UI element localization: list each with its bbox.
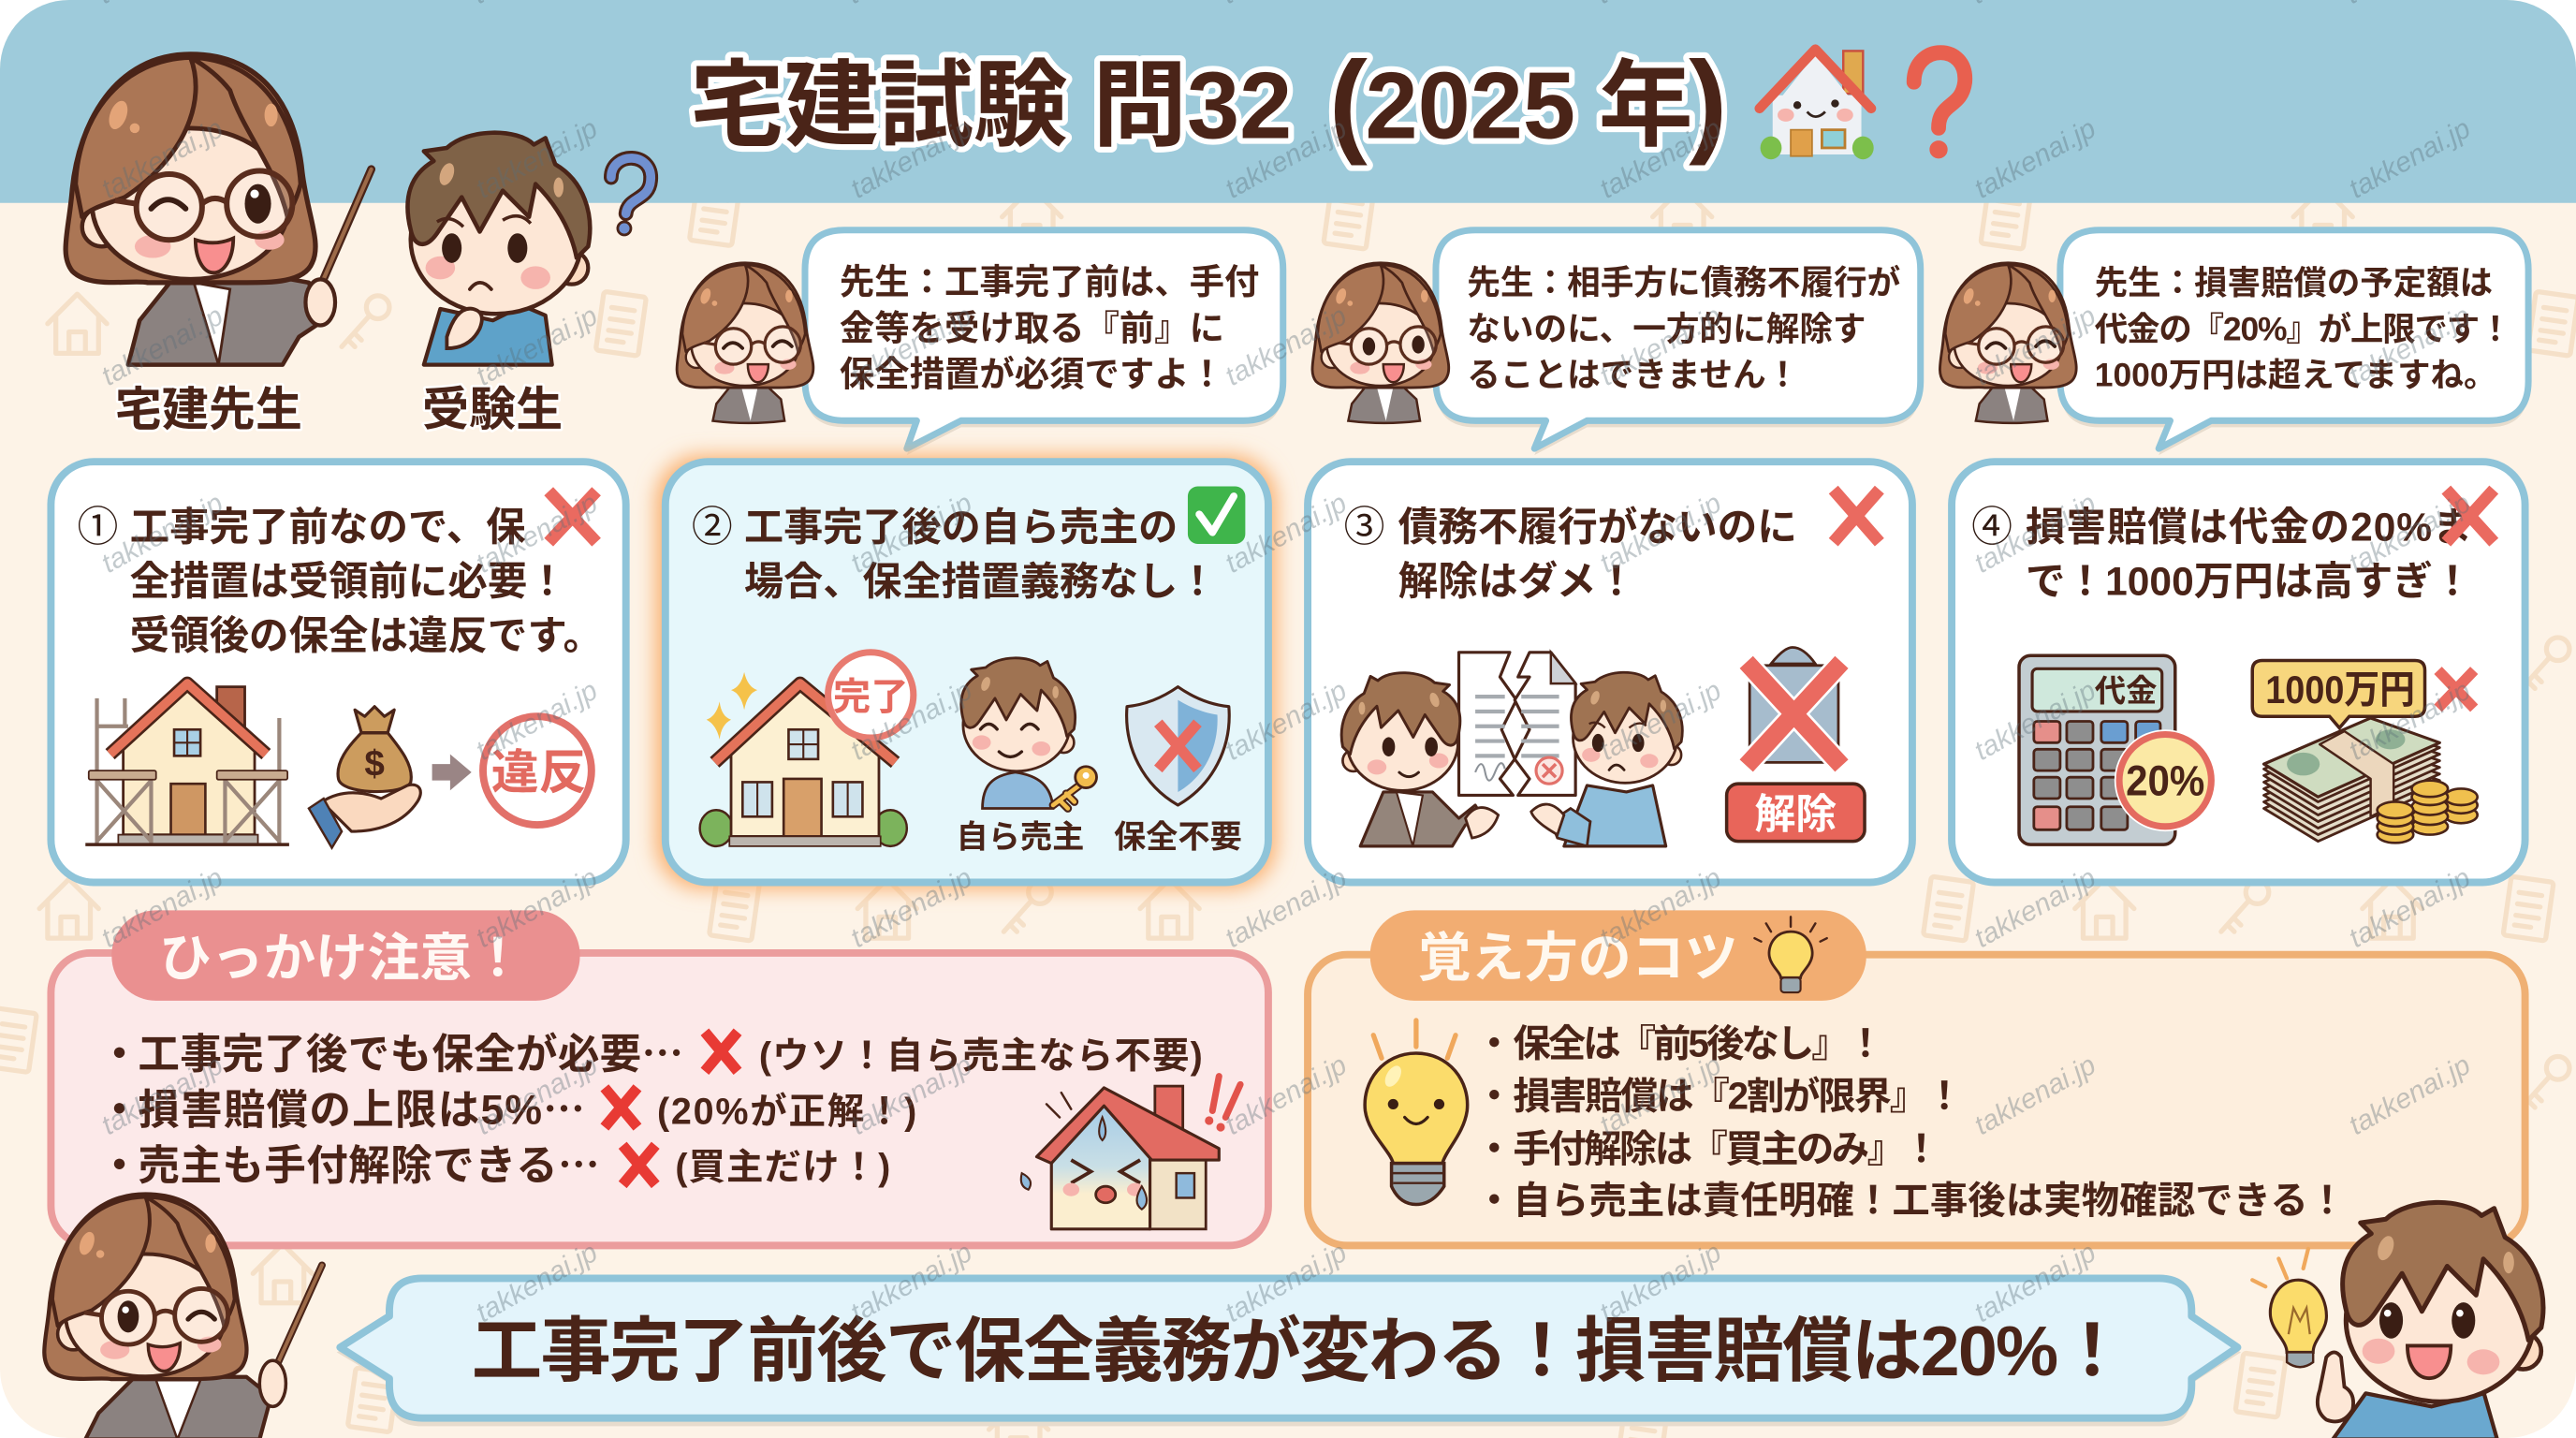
arrow	[432, 755, 472, 790]
watermarks: takkenai.jp	[1595, 862, 1726, 954]
speech bubble 3: 1000万円は超えてますね。	[2095, 356, 2496, 393]
illustration: torn contract	[1459, 653, 1575, 795]
price sign	[2252, 661, 2425, 728]
panel: trap warning	[51, 910, 1268, 1245]
price sign: 1000万円	[2265, 668, 2415, 712]
icon: small bulb	[1754, 917, 1827, 992]
watermarks: takkenai.jp	[845, 1049, 977, 1141]
speech bubble 1: 金等を受け取る『前』に	[840, 308, 1224, 347]
bottom teacher character	[44, 1194, 322, 1438]
bullet list: 工事完了後でも保全が必要…	[138, 1020, 683, 1080]
icon: red cross	[1834, 490, 1880, 542]
icon: money stack	[2264, 718, 2478, 843]
seller in suit	[1341, 673, 1499, 846]
speech bubble 1: 先生：工事完了前は、手付	[840, 262, 1259, 301]
watermarks: takkenai.jp	[1595, 488, 1726, 580]
icon: calculator: 代金	[2095, 674, 2157, 709]
speech bubble 3	[2060, 230, 2528, 455]
bullet list: 損害賠償の上限は5%…	[138, 1075, 585, 1136]
watermarks: takkenai.jp	[1969, 862, 2101, 954]
card 4 text: で！1000万円は高すぎ！	[2026, 559, 2472, 603]
title: (	[1329, 38, 1368, 167]
stamp: violation	[483, 716, 592, 825]
bulb next to bottom student	[2252, 1249, 2326, 1367]
watermarks: takkenai.jp	[2344, 301, 2476, 392]
label: student: 受験生	[422, 384, 563, 436]
watermarks: takkenai.jp	[1969, 1237, 2101, 1328]
card 1	[51, 462, 626, 882]
bullet list: 売主も手付解除できる…	[138, 1131, 600, 1192]
bullet list	[98, 1020, 1203, 1192]
watermarks: takkenai.jp	[1595, 1237, 1726, 1328]
speech bubble 2: 先生：相手方に債務不履行が	[1467, 264, 1900, 301]
speech bubble 1	[805, 230, 1283, 455]
card 2 text: 工事完了後の自ら売主の	[744, 505, 1178, 549]
watermarks: takkenai.jp	[1595, 301, 1726, 392]
speech bubble 2: ないのに、一方的に解除す	[1467, 310, 1866, 347]
card 3	[1308, 462, 1912, 882]
card 1 text: 全措置は受領前に必要！	[130, 559, 567, 603]
icon: calculator	[2019, 655, 2175, 844]
bullet list: 自ら売主は責任明確！工事後は実物確認できる！	[1513, 1179, 2346, 1222]
watermarks: takkenai.jp	[96, 301, 228, 392]
bullet list: 保全は『前5後なし』！	[1513, 1022, 1884, 1065]
small teacher 3	[1939, 263, 2076, 423]
watermarks: takkenai.jp	[1221, 675, 1352, 767]
bottom student character	[2318, 1202, 2543, 1438]
stamp: violation: 違反	[491, 745, 587, 799]
red crosses	[605, 1032, 738, 1184]
watermarks: takkenai.jp	[1595, 1049, 1726, 1141]
title: )	[1689, 38, 1727, 167]
icon: red cross	[549, 492, 596, 542]
bullet list: ・	[98, 1087, 140, 1133]
title: 年	[1599, 53, 1693, 158]
watermarks: takkenai.jp	[1969, 1049, 2101, 1141]
card 1 number: ①	[77, 504, 118, 550]
title: 2025	[1365, 53, 1575, 158]
big teacher character	[66, 54, 372, 365]
icon: money bag on hand	[309, 707, 420, 848]
bullet list: (ウソ！自ら売主なら不要)	[759, 1035, 1203, 1077]
title: 宅建試験	[690, 53, 1068, 158]
heading pill: 覚え方のコツ	[1418, 929, 1738, 989]
bullet list	[1475, 1022, 2346, 1222]
watermarks: takkenai.jp	[2344, 1049, 2476, 1141]
self-seller boy with key	[961, 658, 1097, 809]
button: cancellation: 解除	[1754, 792, 1837, 838]
bullet list: 損害賠償は『2割が限界』！	[1513, 1075, 1963, 1118]
panel: memory tips	[1308, 910, 2525, 1245]
watermarks: takkenai.jp	[1595, 113, 1726, 205]
watermarks: takkenai.jp	[845, 1237, 977, 1328]
icon: red cross	[2438, 670, 2474, 708]
card 2 text: 場合、保全措置義務なし！	[744, 559, 1217, 603]
bullet list: ・	[1475, 1075, 1513, 1118]
card 2	[666, 462, 1268, 882]
icon: shield with cross	[1127, 687, 1229, 805]
card 4	[1952, 462, 2525, 882]
watermarks: takkenai.jp	[471, 1237, 603, 1328]
watermarks: takkenai.jp	[1595, 675, 1726, 767]
bullet list: (20%が正解！)	[657, 1091, 916, 1132]
card 4 number: ④	[1971, 504, 2012, 550]
watermarks: takkenai.jp	[1221, 301, 1352, 392]
speech bubble 2	[1436, 230, 1921, 455]
watermarks: takkenai.jp	[2344, 488, 2476, 580]
watermarks: takkenai.jp	[845, 301, 977, 392]
watermarks: takkenai.jp	[1969, 675, 2101, 767]
watermarks: takkenai.jp	[845, 862, 977, 954]
heading pill	[1370, 910, 1866, 1001]
watermarks: takkenai.jp	[1221, 1049, 1352, 1141]
watermarks: takkenai.jp	[1221, 488, 1352, 580]
small teacher 1	[677, 263, 813, 423]
watermarks: takkenai.jp	[471, 113, 603, 205]
button: cancellation	[1727, 784, 1865, 842]
icon: green check	[1188, 487, 1245, 544]
icon: house under scaffolding	[85, 683, 289, 844]
icon: blue question mark	[611, 158, 651, 235]
label: no protection needed: 保全不要	[1114, 820, 1242, 856]
watermarks: takkenai.jp	[845, 488, 977, 580]
card 1 text: 工事完了前なので、保	[130, 505, 526, 549]
label: teacher: 宅建先生	[115, 384, 302, 436]
icon: red question mark	[1914, 52, 1965, 157]
icon: completed house	[700, 672, 907, 846]
watermarks: takkenai.jp	[1221, 113, 1352, 205]
card 4 text: 損害賠償は代金の20%ま	[2026, 505, 2472, 549]
heading pill: ひっかけ注意！	[159, 930, 524, 988]
watermarks: takkenai.jp	[96, 862, 228, 954]
bullet list: ・	[98, 1143, 140, 1189]
bottom banner	[337, 1278, 2241, 1426]
card 3 text: 債務不履行がないのに	[1398, 505, 1797, 550]
bullet list: ・	[1475, 1127, 1513, 1170]
watermarks: takkenai.jp	[2344, 113, 2476, 205]
watermarks: takkenai.jp	[471, 488, 603, 580]
small teacher 2	[1312, 263, 1449, 423]
badge: 20%: 20%	[2126, 756, 2204, 804]
badge: 20%	[2115, 729, 2217, 831]
label: self-seller: 自ら売主	[956, 820, 1084, 856]
card 1 text: 受領後の保全は違反です。	[130, 613, 603, 657]
bullet list: (買主だけ！)	[675, 1147, 890, 1188]
watermarks: takkenai.jp	[845, 675, 977, 767]
icon: crossed out clipboard	[1747, 648, 1841, 766]
watermarks: takkenai.jp	[96, 488, 228, 580]
watermarks: takkenai.jp	[1969, 113, 2101, 205]
speech bubble 3: 代金の『20%』が上限です！	[2095, 310, 2512, 347]
watermarks: takkenai.jp	[471, 862, 603, 954]
watermarks: takkenai.jp	[845, 113, 977, 205]
watermarks: takkenai.jp	[2344, 675, 2476, 767]
bullet list: ・	[1475, 1179, 1513, 1222]
stamp: completed	[828, 653, 914, 738]
watermarks: takkenai.jp	[471, 675, 603, 767]
stamp: completed: 完了	[833, 675, 909, 718]
student character	[407, 133, 590, 365]
buyer in hoodie	[1531, 672, 1682, 846]
heading pill	[111, 910, 580, 1001]
watermarks: takkenai.jp	[471, 1049, 603, 1141]
icon: red cross	[2446, 490, 2494, 542]
speech bubble 3: 先生：損害賠償の予定額は	[2095, 264, 2493, 301]
bottom banner: 工事完了前後で保全義務が変わる！損害賠償は20%！	[472, 1312, 2128, 1390]
icon: smiling house	[1760, 50, 1874, 159]
icon: crying house	[1021, 1077, 1240, 1229]
bullet list: ・	[98, 1032, 140, 1078]
title: 問32	[1092, 53, 1292, 158]
watermarks: takkenai.jp	[1221, 862, 1352, 954]
watermarks: takkenai.jp	[96, 1049, 228, 1141]
speech bubble 1: 保全措置が必須ですよ！	[840, 354, 1224, 393]
card 2 number: ②	[692, 504, 733, 550]
watermarks: takkenai.jp	[1221, 1237, 1352, 1328]
watermarks: takkenai.jp	[471, 301, 603, 392]
header band	[0, 0, 2576, 203]
watermarks: takkenai.jp	[2344, 862, 2476, 954]
watermarks: takkenai.jp	[96, 113, 228, 205]
watermarks: takkenai.jp	[1969, 301, 2101, 392]
speech bubble 2: ることはできません！	[1467, 356, 1799, 393]
bullet list: ・	[1475, 1022, 1513, 1065]
card 3 number: ③	[1344, 504, 1385, 550]
card 2 highlight glow	[655, 455, 1277, 889]
watermarks: takkenai.jp	[1969, 488, 2101, 580]
card 3 text: 解除はダメ！	[1398, 559, 1636, 604]
icon: money bag on hand: $	[364, 743, 385, 784]
bullet list: 手付解除は『買主のみ』！	[1513, 1127, 1940, 1170]
icon: smiling bulb	[1365, 1020, 1468, 1204]
